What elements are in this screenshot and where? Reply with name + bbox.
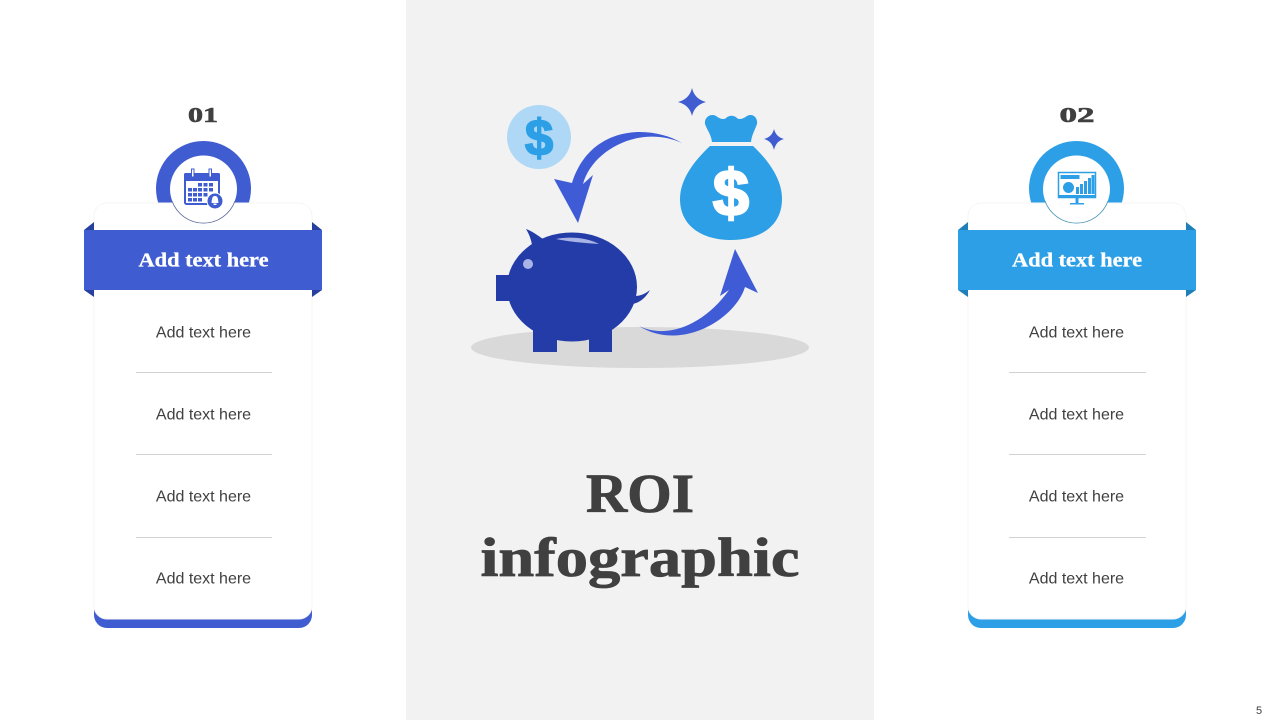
page number: 5 — [1256, 705, 1262, 717]
arrow: money bag to piggy bank — [554, 132, 682, 223]
ribbon heading — [84, 230, 322, 290]
icon circle — [1043, 156, 1110, 223]
ribbon folds — [958, 222, 1196, 297]
title: infographic — [480, 527, 800, 588]
icon circle — [170, 156, 237, 223]
ribbon heading: Add text here — [1012, 250, 1142, 272]
list items: Add text here — [156, 488, 251, 506]
icon: dollar coin: $ — [525, 109, 553, 166]
list items: Add text here — [1029, 324, 1124, 342]
icon: small sparkle — [764, 129, 784, 150]
panel: card 01 — [84, 103, 322, 628]
list items: Add text here — [1029, 406, 1124, 424]
number 02: 02 — [1060, 103, 1094, 127]
number 01: 01 — [188, 103, 218, 127]
icon: piggy bank — [496, 229, 650, 352]
ribbon folds — [84, 222, 322, 297]
ring — [156, 141, 251, 236]
icon: monitor with charts — [1058, 172, 1096, 204]
card body — [94, 203, 312, 619]
ground shadow — [471, 327, 809, 368]
ring — [1029, 141, 1124, 236]
card body — [968, 203, 1186, 619]
icon: dollar coin — [507, 105, 571, 169]
list items: Add text here — [156, 324, 251, 342]
icon: money bag — [680, 115, 782, 240]
ribbon heading: Add text here — [138, 250, 269, 272]
card bottom edge — [968, 590, 1186, 628]
illustration: piggy bank and money cycle — [471, 88, 809, 368]
list items: Add text here — [1029, 570, 1124, 588]
arrow: piggy bank to money bag — [639, 249, 758, 336]
list items — [156, 324, 251, 588]
icon: large sparkle — [678, 88, 706, 116]
icon: calendar — [184, 169, 223, 209]
list items — [1029, 324, 1124, 588]
panel: centre background — [406, 0, 874, 720]
list items: Add text here — [1029, 488, 1124, 506]
title: ROI — [586, 463, 694, 524]
card bottom edge — [94, 590, 312, 628]
list items: Add text here — [156, 570, 251, 588]
title — [480, 463, 800, 588]
list items: Add text here — [156, 406, 251, 424]
icon: money bag: $ — [713, 156, 749, 229]
panel: card 02 — [958, 103, 1196, 628]
ribbon heading — [958, 230, 1196, 290]
